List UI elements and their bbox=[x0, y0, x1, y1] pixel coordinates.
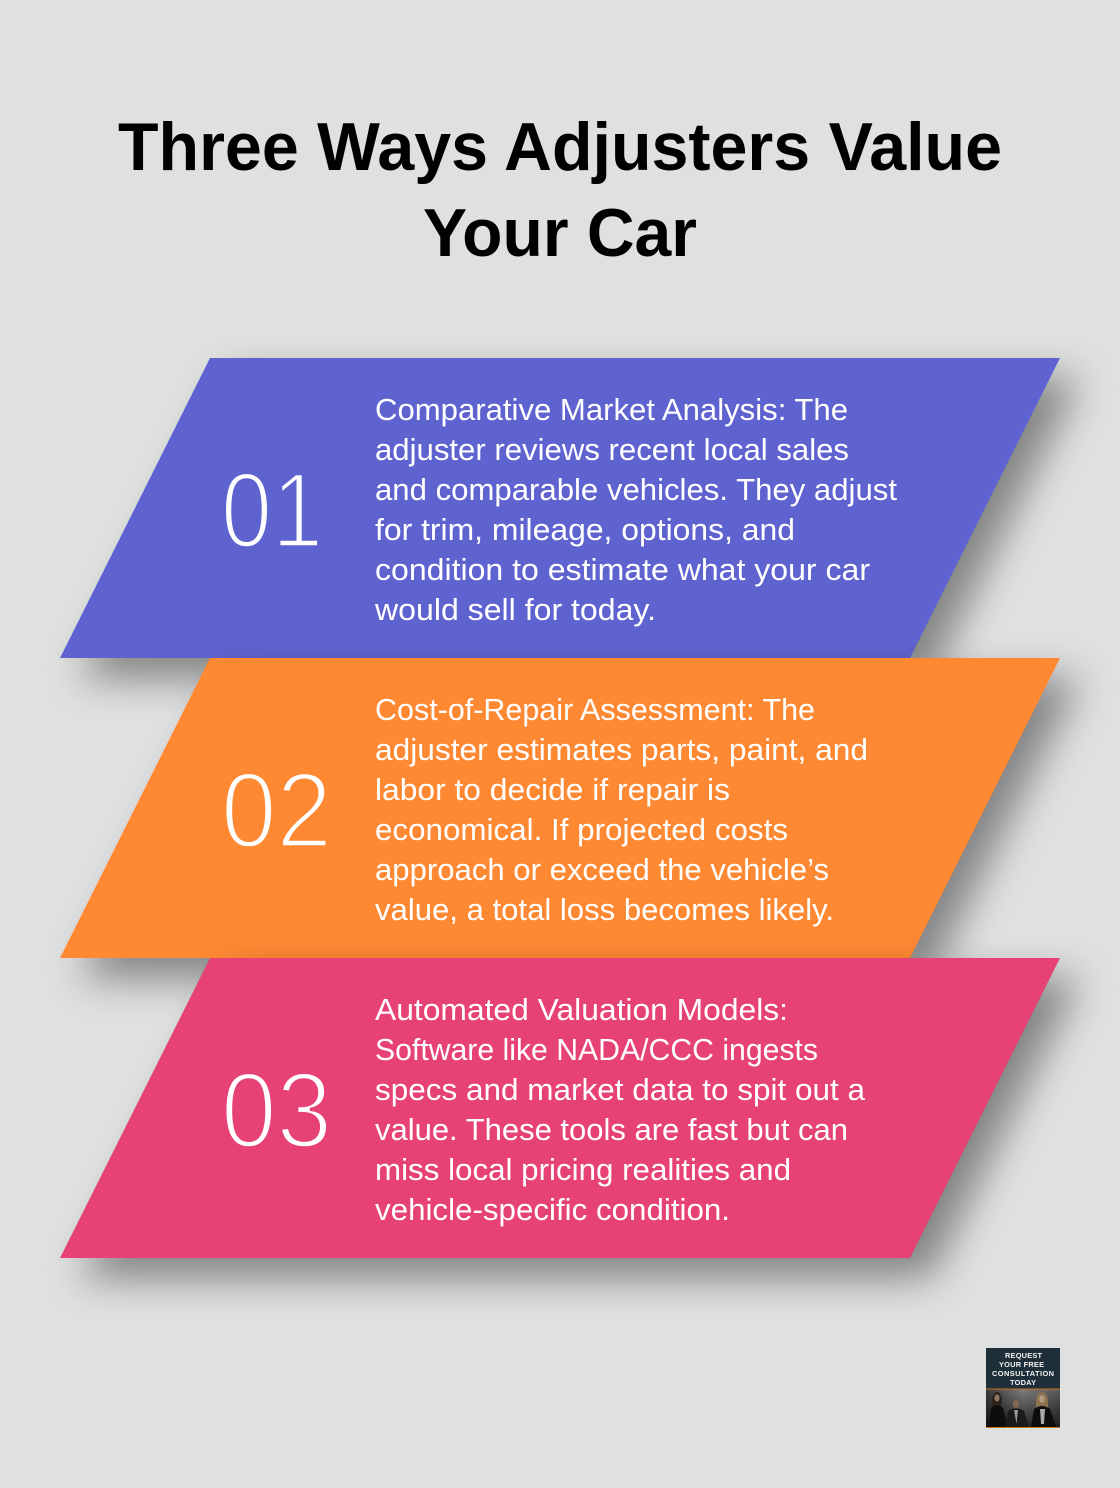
text block: step 02: approach or exceed the vehicle’s bbox=[375, 852, 829, 887]
panel: step 01 comparative market analysis bbox=[60, 358, 1060, 658]
text block: step 02: labor to decide if repair is bbox=[375, 772, 730, 807]
badge: request your free consultation: YOUR FREE bbox=[999, 1360, 1044, 1369]
text block: step 02: value, a total loss becomes likely. bbox=[375, 892, 834, 927]
badge: request your free consultation: TODAY bbox=[1010, 1378, 1036, 1387]
text block: step 02: Cost-of-Repair Assessment: The bbox=[375, 692, 815, 727]
text block: step 01 bbox=[374, 392, 897, 627]
text block: step 03: miss local pricing realities and bbox=[375, 1152, 791, 1187]
badge: request your free consultation: CONSULTATION bbox=[992, 1369, 1054, 1378]
text block: step 01: for trim, mileage, options, and bbox=[375, 512, 795, 547]
panel: step 02 cost-of-repair assessment bbox=[60, 658, 1060, 958]
number 01: 01 bbox=[221, 450, 323, 570]
parallelogram: orange bbox=[60, 658, 1060, 958]
panel: step 03 automated valuation models bbox=[60, 958, 1060, 1258]
title: Your Car bbox=[423, 195, 697, 271]
parallelogram: pink bbox=[60, 958, 1060, 1258]
text block: step 02: adjuster estimates parts, paint, and bbox=[375, 732, 868, 767]
parallelogram: blue bbox=[60, 358, 1060, 658]
title: Three Ways Adjusters Value bbox=[118, 109, 1002, 185]
text block: step 03: Software like NADA/CCC ingests bbox=[375, 1032, 818, 1067]
text block: step 03: specs and market data to spit out a bbox=[375, 1072, 866, 1107]
text block: step 01: adjuster reviews recent local sales bbox=[375, 432, 849, 467]
number 03: 03 bbox=[221, 1050, 332, 1170]
text block: step 02: economical. If projected costs bbox=[375, 812, 788, 847]
text block: step 03: Automated Valuation Models: bbox=[375, 992, 788, 1027]
text block: step 01: and comparable vehicles. They adjust bbox=[375, 472, 897, 507]
title bbox=[118, 109, 1002, 271]
badge: request your free consultation: REQUEST bbox=[1005, 1351, 1042, 1360]
text block: step 01: Comparative Market Analysis: The bbox=[375, 392, 848, 427]
text block: step 02 bbox=[375, 692, 868, 927]
text block: step 03 bbox=[375, 992, 866, 1227]
badge: request your free consultation bbox=[986, 1348, 1060, 1428]
text block: step 03: vehicle-specific condition. bbox=[375, 1192, 730, 1227]
text block: step 03: value. These tools are fast but can bbox=[375, 1112, 848, 1147]
text block: step 01: would sell for today. bbox=[374, 592, 656, 627]
number 02: 02 bbox=[221, 750, 332, 870]
icon: three people photo bbox=[989, 1392, 1056, 1427]
text block: step 01: condition to estimate what your car bbox=[375, 552, 870, 587]
